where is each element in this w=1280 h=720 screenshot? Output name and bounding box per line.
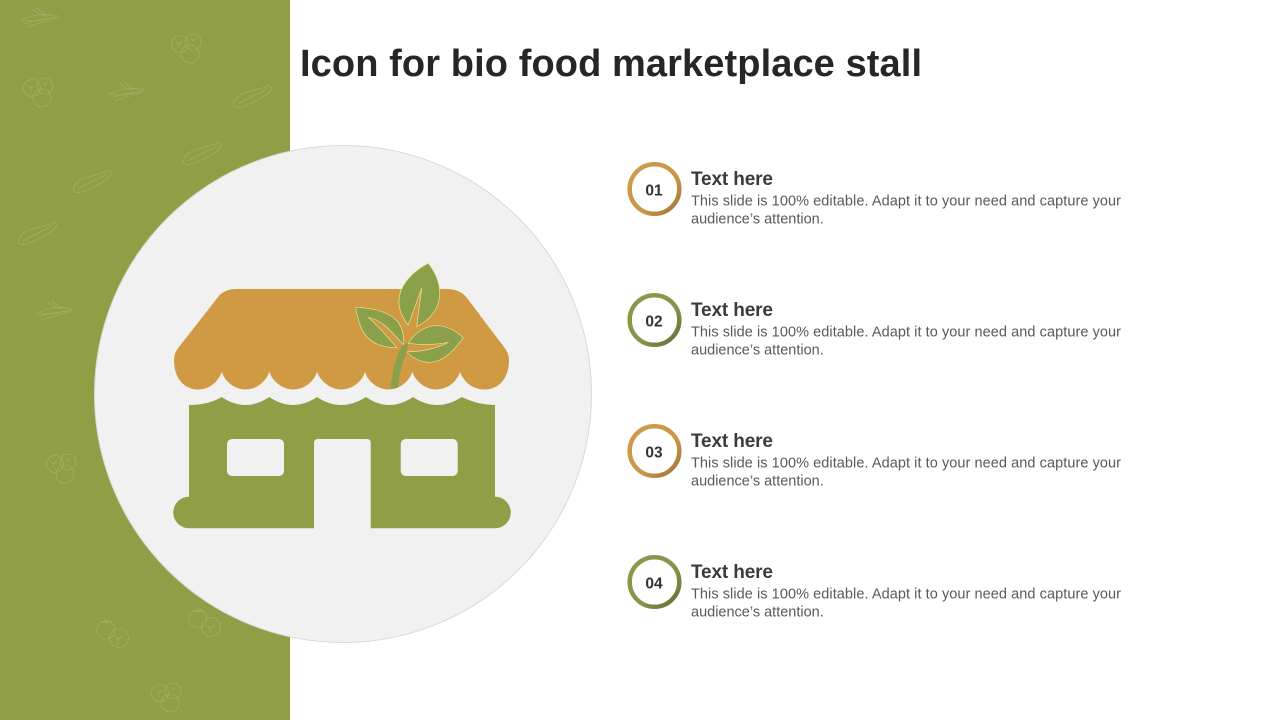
marker 01: 01: [645, 182, 663, 200]
item 01: [630, 164, 1121, 228]
panel: grey circle: [94, 146, 592, 642]
panel: green sidebar: [0, 0, 290, 720]
item 04: [630, 557, 1121, 620]
marker 02: 02: [645, 314, 663, 330]
body text 02: [691, 324, 1121, 358]
marker 04: 04: [645, 576, 663, 592]
item 03: [630, 426, 1121, 490]
body text 04: This slide is 100% editable. Adapt it to your need and capture your: [691, 586, 1121, 602]
title: Icon for bio food marketplace stall: [300, 43, 922, 85]
body text 01: This slide is 100% editable. Adapt it to your need and capture your: [691, 194, 1121, 210]
heading 03: Text here: [691, 431, 773, 452]
heading 01: Text here: [691, 169, 773, 190]
heading 04: Text here: [691, 562, 773, 583]
top leaf: [399, 263, 440, 327]
heading 02: Text here: [691, 300, 773, 321]
body text 02: audience’s attention.: [691, 342, 824, 358]
marker 01: [630, 164, 679, 214]
body text 03: This slide is 100% editable. Adapt it to your need and capture your: [691, 456, 1121, 472]
awning roof: [174, 289, 509, 390]
body text 01: audience’s attention.: [691, 212, 824, 228]
body text 03: audience’s attention.: [691, 474, 824, 490]
stall building: [173, 397, 511, 528]
decorative vegetable doodles: [19, 8, 271, 712]
body text 02: This slide is 100% editable. Adapt it to your need and capture your: [691, 324, 1121, 340]
left window: [227, 439, 284, 476]
icon: leaf sprig: [356, 263, 463, 388]
marker 02: [630, 295, 679, 345]
left leaf: [356, 307, 404, 348]
body text 04: audience’s attention.: [691, 604, 824, 620]
marker 03: 03: [645, 444, 663, 462]
body text 03: [691, 456, 1121, 490]
right window: [401, 439, 458, 476]
body text 01: [691, 194, 1121, 228]
icon: market stall with leaf: [173, 263, 511, 528]
marker 04: [630, 557, 679, 607]
item 02: [630, 295, 1121, 358]
right leaf: [407, 326, 463, 362]
marker 03: [630, 426, 679, 476]
body text 04: [691, 586, 1121, 620]
stem: [391, 343, 408, 388]
